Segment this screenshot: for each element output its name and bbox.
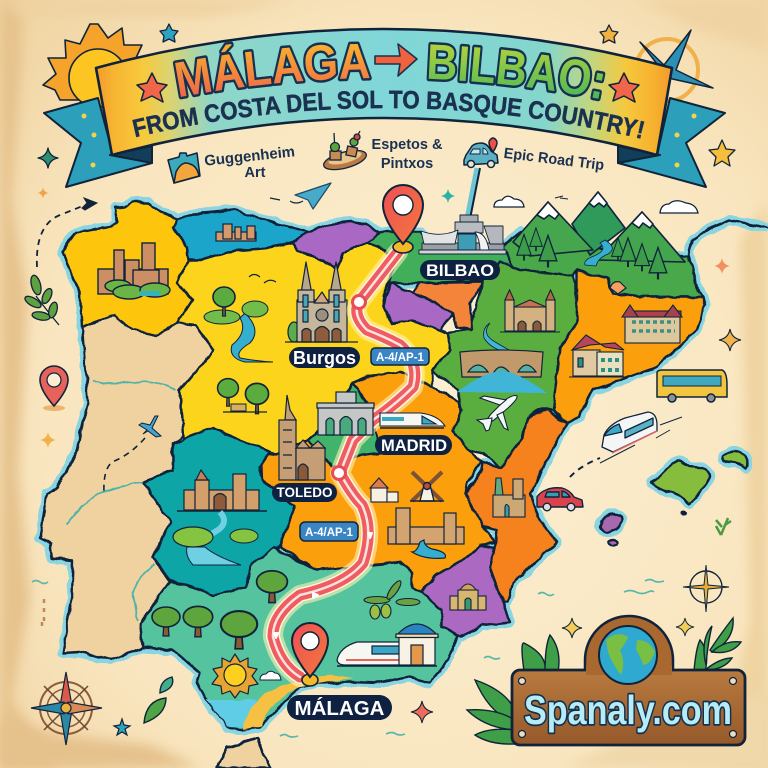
Murcia building <box>450 584 486 610</box>
icon: globe <box>599 626 657 684</box>
title banner <box>43 28 726 188</box>
title: Bilbao: BILBAO: <box>426 42 606 102</box>
feature: Guggenheim Art: Guggenheim <box>203 143 296 170</box>
title: Málaga: MÁLAGA <box>172 42 372 100</box>
Burgos cathedral <box>285 262 358 342</box>
small building on orange patch <box>610 282 626 294</box>
map of Spain and Portugal <box>40 202 768 768</box>
left map pin <box>40 366 68 411</box>
castle and river in La Mancha <box>388 508 464 558</box>
trees and hut in Castilla <box>218 379 269 414</box>
icon: blue car with pin <box>464 138 498 168</box>
feature: Epic Road Trip: Epic Road Trip <box>503 145 605 174</box>
red car <box>537 488 583 511</box>
laurel sprig left <box>23 274 59 325</box>
olive branch <box>364 579 420 619</box>
compass top right <box>636 30 713 101</box>
compass right <box>683 565 729 612</box>
left ribbon tail <box>44 98 152 187</box>
icon: art puzzle <box>168 153 200 183</box>
dashed flight path and plane <box>37 198 97 267</box>
airplane in Aragón <box>477 396 517 431</box>
sign board <box>512 670 745 745</box>
leaves around sign <box>467 618 741 744</box>
fast train <box>570 412 682 477</box>
label: A-4/AP-1 north <box>371 348 429 365</box>
clouds <box>494 196 698 213</box>
site name: Spanaly.com <box>524 687 732 733</box>
route to Bilbao <box>273 252 415 677</box>
small sprig <box>716 518 731 535</box>
tree and river in Castilla <box>204 274 276 362</box>
castle in Extremadura <box>177 470 267 511</box>
feature: Guggenheim Art: Art <box>245 165 266 181</box>
mountains <box>513 192 685 266</box>
train and station in Andalucía <box>337 624 438 666</box>
label: A-4/AP-1 south <box>300 522 358 541</box>
house near Madrid route <box>370 478 398 502</box>
icon: skewers on plate <box>322 131 368 173</box>
decorative stars top <box>38 24 735 168</box>
Toledo cathedral <box>279 395 325 480</box>
church in Aragón <box>500 290 560 332</box>
right side sparkles <box>411 258 741 723</box>
building in Catalonia north <box>622 305 682 343</box>
wood screws <box>518 678 736 738</box>
ruins in Asturias <box>216 224 256 241</box>
teal sparkle <box>441 189 455 203</box>
train near Madrid <box>380 413 445 428</box>
dashes <box>42 599 44 628</box>
right ribbon tail <box>618 98 725 187</box>
label: A-4/AP-1 north: A-4/AP-1 <box>376 352 425 364</box>
small cloud Andalucía <box>260 671 281 680</box>
label: Burgos: Burgos <box>293 348 356 368</box>
label: Madrid: MADRID <box>381 437 447 455</box>
river and hills in Extremadura <box>173 512 258 565</box>
sun in Andalucía <box>212 654 258 698</box>
rivers in Portugal <box>67 380 177 620</box>
gold sparkle left <box>40 432 56 448</box>
castle in Valencia <box>493 478 525 517</box>
coast beach and sea near Málaga <box>207 675 352 730</box>
orange diamond <box>38 188 48 198</box>
bus <box>657 370 727 402</box>
ribbon dots <box>82 114 696 168</box>
coast halo <box>40 202 768 730</box>
banner stars <box>137 73 639 102</box>
feature: Espetos & Pintxos: Espetos & <box>372 137 443 153</box>
waves <box>32 580 664 737</box>
coast line below car <box>466 168 480 224</box>
feature: Espetos & Pintxos: Pintxos <box>381 156 433 172</box>
building in Catalonia south <box>569 335 625 377</box>
leaves near Gibraltar <box>144 677 173 723</box>
feature: Espetos & Pintxos <box>322 131 443 173</box>
feature: Guggenheim Art <box>168 143 296 183</box>
Puerta de Alcalá <box>317 392 374 435</box>
Málaga map pin <box>292 623 328 686</box>
label: Toledo: TOLEDO <box>276 485 333 500</box>
label: Málaga: MÁLAGA <box>295 697 385 720</box>
bridge and river in Aragón <box>457 323 547 393</box>
sun top left <box>43 24 150 107</box>
castle in Galicia <box>98 243 170 299</box>
regions <box>40 202 768 768</box>
olive trees in Andalucía <box>152 571 287 649</box>
feature: Epic Road Trip <box>464 138 605 174</box>
title arrow <box>375 44 417 76</box>
pine trees in mountains <box>517 228 667 279</box>
Bilbao map pin <box>383 185 423 253</box>
subtitle: FROM COSTA DEL SOL TO BASQUE COUNTRY! <box>132 90 644 139</box>
banner body <box>96 29 672 155</box>
Guggenheim museum <box>419 215 506 254</box>
label: A-4/AP-1 south: A-4/AP-1 <box>305 527 354 539</box>
Spanaly.com sign <box>467 616 745 745</box>
blue plane and dashes over Portugal <box>104 416 161 492</box>
label: Toledo <box>272 483 337 502</box>
paper plane and dash <box>270 183 331 209</box>
windmill <box>410 472 444 501</box>
compass rose bottom left <box>31 672 102 745</box>
label: Bilbao: BILBAO <box>426 261 494 280</box>
blue star <box>114 719 130 735</box>
sign arch <box>585 616 673 674</box>
